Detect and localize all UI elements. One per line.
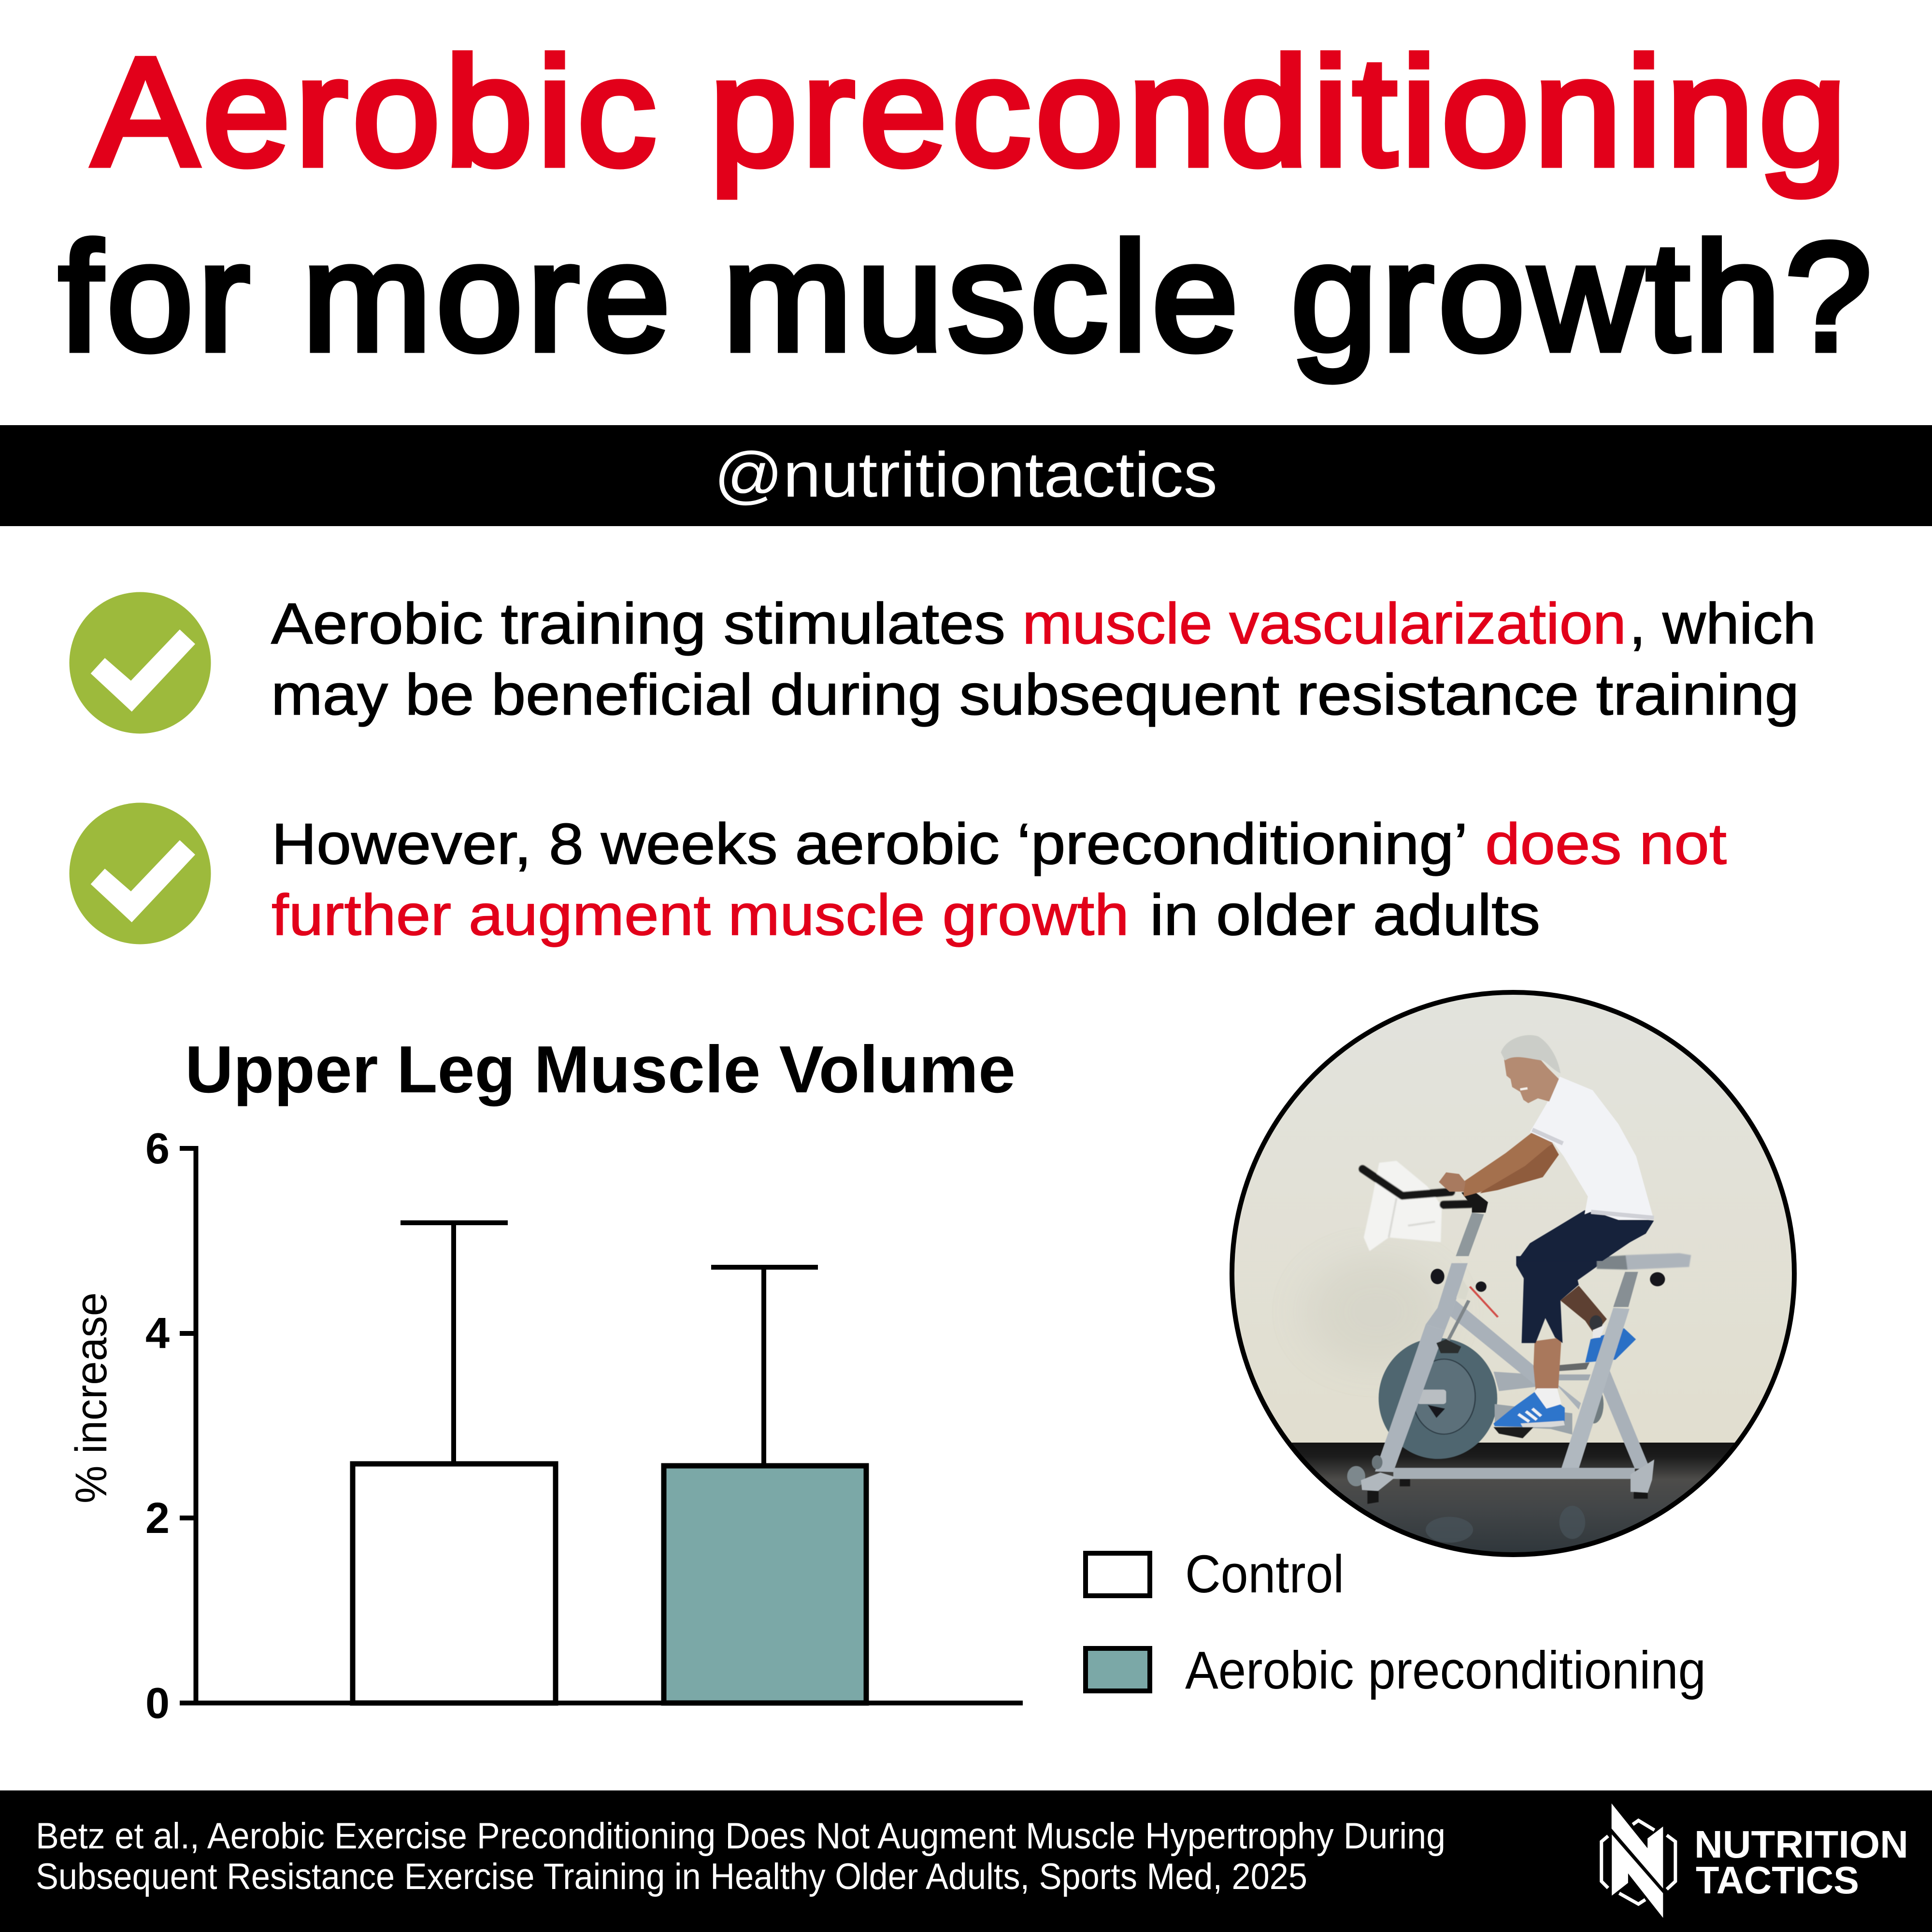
towel xyxy=(1364,1161,1442,1251)
citation xyxy=(36,1816,1445,1897)
text block: point 2: in older adults xyxy=(1150,883,1540,947)
front pedal xyxy=(1493,1427,1533,1438)
handlebar xyxy=(1362,1169,1471,1205)
shorts xyxy=(1516,1256,1609,1343)
far arm xyxy=(1480,1144,1559,1193)
y axis tick labels xyxy=(145,1125,170,1728)
y axis title: % increase xyxy=(67,1292,116,1503)
text block: point 2: However, 8 weeks aerobic ‘preconditioning’ xyxy=(272,812,1468,876)
footer band xyxy=(0,1790,1932,1932)
text block: point 2: does not xyxy=(1485,812,1727,876)
shirt xyxy=(1530,1076,1654,1220)
thigh xyxy=(1517,1210,1654,1261)
error bar: control xyxy=(401,1223,508,1464)
chart heading: Upper Leg Muscle Volume xyxy=(185,1032,1016,1107)
text block: point 1: muscle vascularization xyxy=(1022,591,1626,656)
bar chart xyxy=(67,1125,1023,1728)
logo wordmark xyxy=(1694,1823,1908,1902)
logo wordmark: NUTRITION xyxy=(1694,1823,1908,1866)
rear shoe and rear leg xyxy=(1585,1328,1636,1362)
rear wheel and housing xyxy=(1584,1385,1603,1423)
logo mark xyxy=(1602,1803,1675,1918)
floor xyxy=(1227,1443,1802,1559)
photo ring xyxy=(1232,992,1794,1555)
flywheel xyxy=(1379,1338,1497,1459)
legend swatch: aerobic preconditioning xyxy=(1086,1648,1150,1691)
axes xyxy=(180,1148,1023,1703)
legend label: control: Control xyxy=(1185,1545,1344,1604)
hair xyxy=(1501,1035,1560,1073)
knobs, chain and brake xyxy=(1431,1269,1445,1284)
title line 2: for more muscle growth? xyxy=(59,211,1876,384)
icon: check mark 2 xyxy=(70,803,211,944)
bar: aerobic preconditioning xyxy=(664,1466,866,1703)
y axis tick labels: 2 xyxy=(145,1494,170,1543)
legend label: aerobic preconditioning: Aerobic preconditioning xyxy=(1185,1641,1706,1700)
logo wordmark: TACTICS xyxy=(1696,1859,1859,1902)
citation: Subsequent Resistance Exercise Training in Healthy Older Adults, Sports Med, 2025 xyxy=(36,1856,1307,1897)
legend swatch: control xyxy=(1086,1553,1150,1596)
stem xyxy=(1456,1213,1484,1256)
text block: point 2 xyxy=(272,812,1727,947)
y axis tick labels: 4 xyxy=(145,1309,170,1358)
photo: older woman on exercise bike xyxy=(1227,986,1802,1559)
text block: point 1: Aerobic training stimulates xyxy=(271,591,1005,656)
wall xyxy=(1227,986,1802,1445)
title line 1: Aerobic preconditioning xyxy=(93,26,1851,199)
title xyxy=(59,26,1876,384)
text block: point 2: further augment muscle growth xyxy=(272,883,1129,947)
error bar: aerobic preconditioning xyxy=(711,1267,818,1466)
front leg xyxy=(1533,1337,1561,1390)
face xyxy=(1504,1054,1559,1103)
logo: Nutrition Tactics xyxy=(1602,1803,1908,1918)
near arm xyxy=(1463,1133,1554,1197)
lower bike and legs xyxy=(1307,1256,1665,1543)
bar: control xyxy=(353,1464,556,1703)
y axis tick labels: 0 xyxy=(145,1679,170,1728)
front shoe xyxy=(1493,1392,1565,1427)
handle banner: @nutritiontactics xyxy=(714,439,1217,510)
y axis tick labels: 6 xyxy=(145,1125,170,1173)
text block: point 1: may be beneficial during subsequent resistance training xyxy=(271,662,1799,727)
text block: point 1 xyxy=(271,591,1816,727)
icon: check mark 1 xyxy=(70,592,211,733)
seat, towel and handlebar xyxy=(1362,1161,1691,1270)
upper body xyxy=(1439,1035,1654,1261)
text block: point 1: , which xyxy=(1629,591,1816,656)
handle banner xyxy=(0,425,1932,526)
hand xyxy=(1439,1173,1465,1192)
frame xyxy=(1375,1325,1445,1472)
citation: Betz et al., Aerobic Exercise Preconditioning Does Not Augment Muscle Hypertrophy During xyxy=(36,1816,1445,1857)
legend xyxy=(1086,1545,1706,1700)
